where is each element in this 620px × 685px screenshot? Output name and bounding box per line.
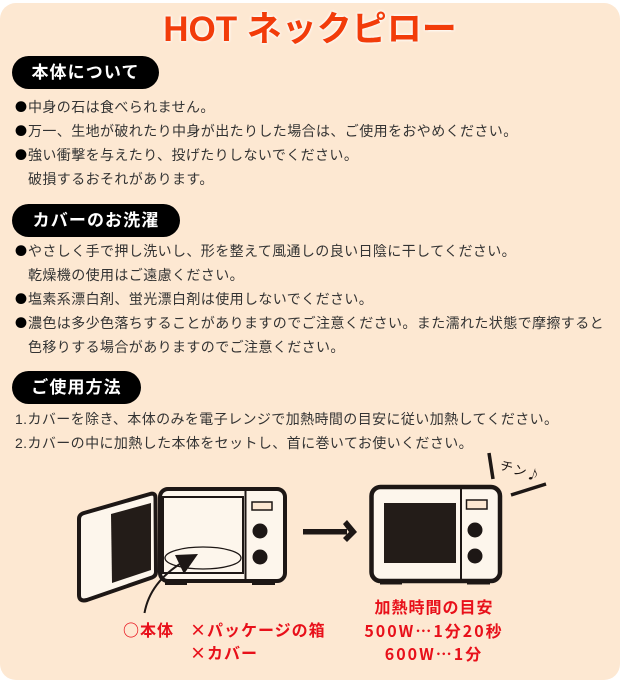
section text: 本体について — [15, 98, 518, 187]
icon: closed microwave — [372, 487, 500, 584]
section text: 本体について: 強い衝撃を与えたり、投げたりしないでください。 — [28, 147, 358, 163]
label: usable items — [123, 617, 326, 664]
section text: 本体について: ● — [15, 98, 27, 115]
sound marks — [489, 453, 546, 495]
label: heating time guide — [364, 594, 504, 665]
heading: カバーのお洗濯 — [12, 204, 180, 237]
section text: ご使用方法: 2.カバーの中に加熱した本体をセットし、首に巻いてお使いください。 — [15, 435, 473, 451]
icon: open microwave — [79, 489, 285, 600]
section text: カバーのお洗濯: 塩素系漂白剤、蛍光漂白剤は使用しないでください。 — [28, 291, 373, 307]
heading: カバーのお洗濯: カバーのお洗濯 — [33, 211, 159, 230]
section text: ご使用方法: 1.カバーを除き、本体のみを電子レンジで加熱時間の目安に従い加熱してください。 — [15, 411, 558, 427]
section text: カバーのお洗濯: ● — [15, 290, 27, 307]
section text: 本体について: 破損するおそれがあります。 — [28, 171, 214, 187]
heading: ご使用方法: ご使用方法 — [31, 378, 122, 397]
label: heating time guide: 500W…1分20秒 — [364, 618, 504, 642]
section text: ご使用方法 — [15, 411, 558, 451]
illustration: microwave diagram — [77, 452, 546, 614]
arrow: pointer to item — [144, 554, 198, 613]
sound marks: チン♪ — [498, 455, 544, 485]
section text: カバーのお洗濯: やさしく手で押し洗いし、形を整えて風通しの良い日陰に干してください。 — [28, 243, 516, 259]
label: usable items: ×パッケージの箱 — [190, 617, 326, 641]
section text: カバーのお洗濯: ● — [15, 314, 27, 331]
section text: カバーのお洗濯: ● — [15, 242, 27, 259]
section text: 本体について: 万一、生地が破れたり中身が出たりした場合は、ご使用をおやめください。 — [28, 123, 518, 139]
ellipse: item position — [165, 547, 241, 569]
title: HOT ネックピロー — [163, 10, 457, 49]
section text: カバーのお洗濯: 色移りする場合がありますのでご注意ください。 — [28, 339, 345, 355]
heading: ご使用方法 — [12, 371, 141, 404]
label: heating time guide: 加熱時間の目安 — [374, 594, 494, 618]
heading: 本体について — [12, 56, 159, 89]
label: usable items: ×カバー — [190, 640, 258, 664]
section text: 本体について: ● — [15, 146, 27, 163]
section text: 本体について: ● — [15, 122, 27, 139]
arrow: next step — [303, 520, 357, 542]
heading: 本体について: 本体について — [31, 63, 140, 82]
section text: カバーのお洗濯 — [15, 242, 604, 355]
section text: 本体について: 中身の石は食べられません。 — [28, 99, 215, 115]
label: heating time guide: 600W…1分 — [385, 641, 483, 665]
label: usable items: ○本体 — [123, 617, 174, 641]
section text: カバーのお洗濯: 濃色は多少色落ちすることがありますのでご注意ください。また濡れた状態で摩擦すると — [28, 315, 604, 331]
section text: カバーのお洗濯: 乾燥機の使用はご遠慮ください。 — [28, 267, 244, 283]
